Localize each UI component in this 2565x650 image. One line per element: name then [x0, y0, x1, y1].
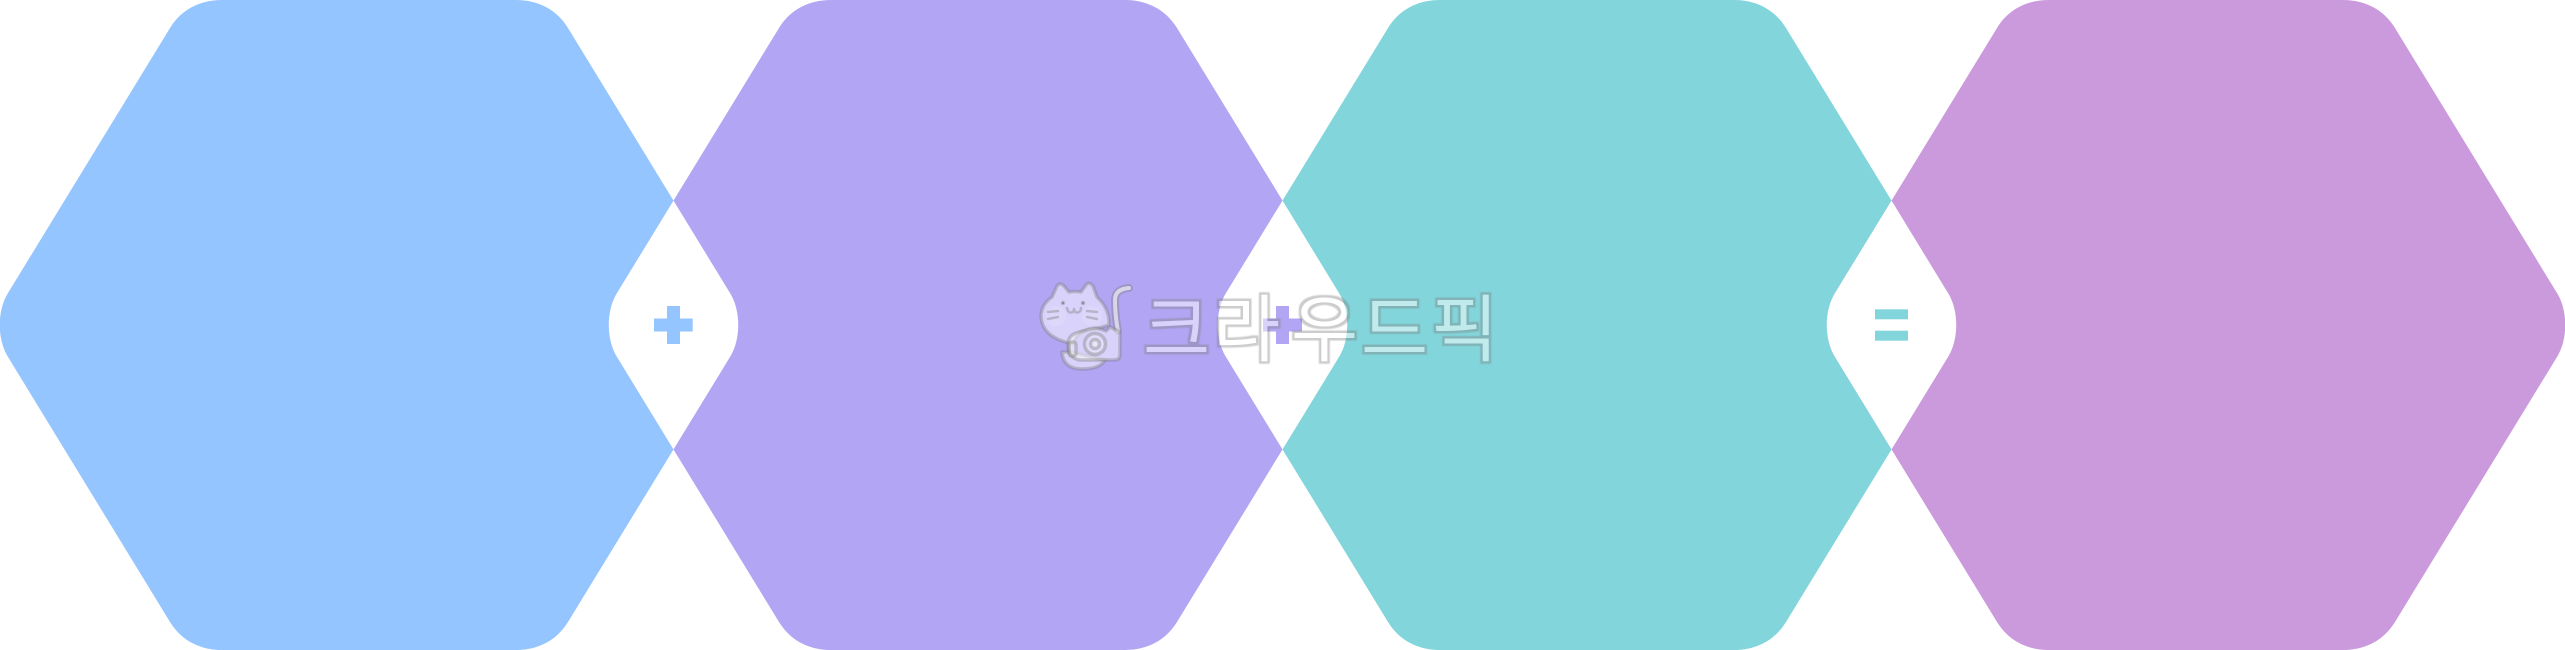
white overlap between teal and pink hexagons — [1826, 200, 1956, 450]
icon: purple plus sign — [1263, 306, 1302, 344]
white overlap between purple and teal hexagons — [1218, 200, 1348, 450]
white overlap between blue and purple hexagons — [608, 200, 738, 450]
cat tail — [1115, 288, 1129, 331]
panel: teal hexagon — [1218, 0, 1956, 650]
watermark: cat with camera logo — [1041, 283, 1129, 369]
cat head — [1041, 283, 1109, 344]
cat cheeks — [1046, 306, 1102, 326]
cat lower body — [1062, 352, 1105, 369]
watermark: brand wordmark: 크라우드픽 — [1143, 290, 1498, 371]
camera body — [1068, 327, 1120, 360]
camera lens — [1084, 334, 1106, 354]
panel: purple hexagon — [609, 0, 1347, 650]
camera lens centre — [1090, 340, 1100, 348]
icon: blue plus sign — [654, 306, 693, 344]
camera grip — [1069, 342, 1076, 356]
panel: blue hexagon — [0, 0, 738, 650]
panel: pink hexagon — [1827, 0, 2565, 650]
icon: teal equals sign — [1875, 309, 1908, 341]
cat face — [1048, 302, 1097, 319]
